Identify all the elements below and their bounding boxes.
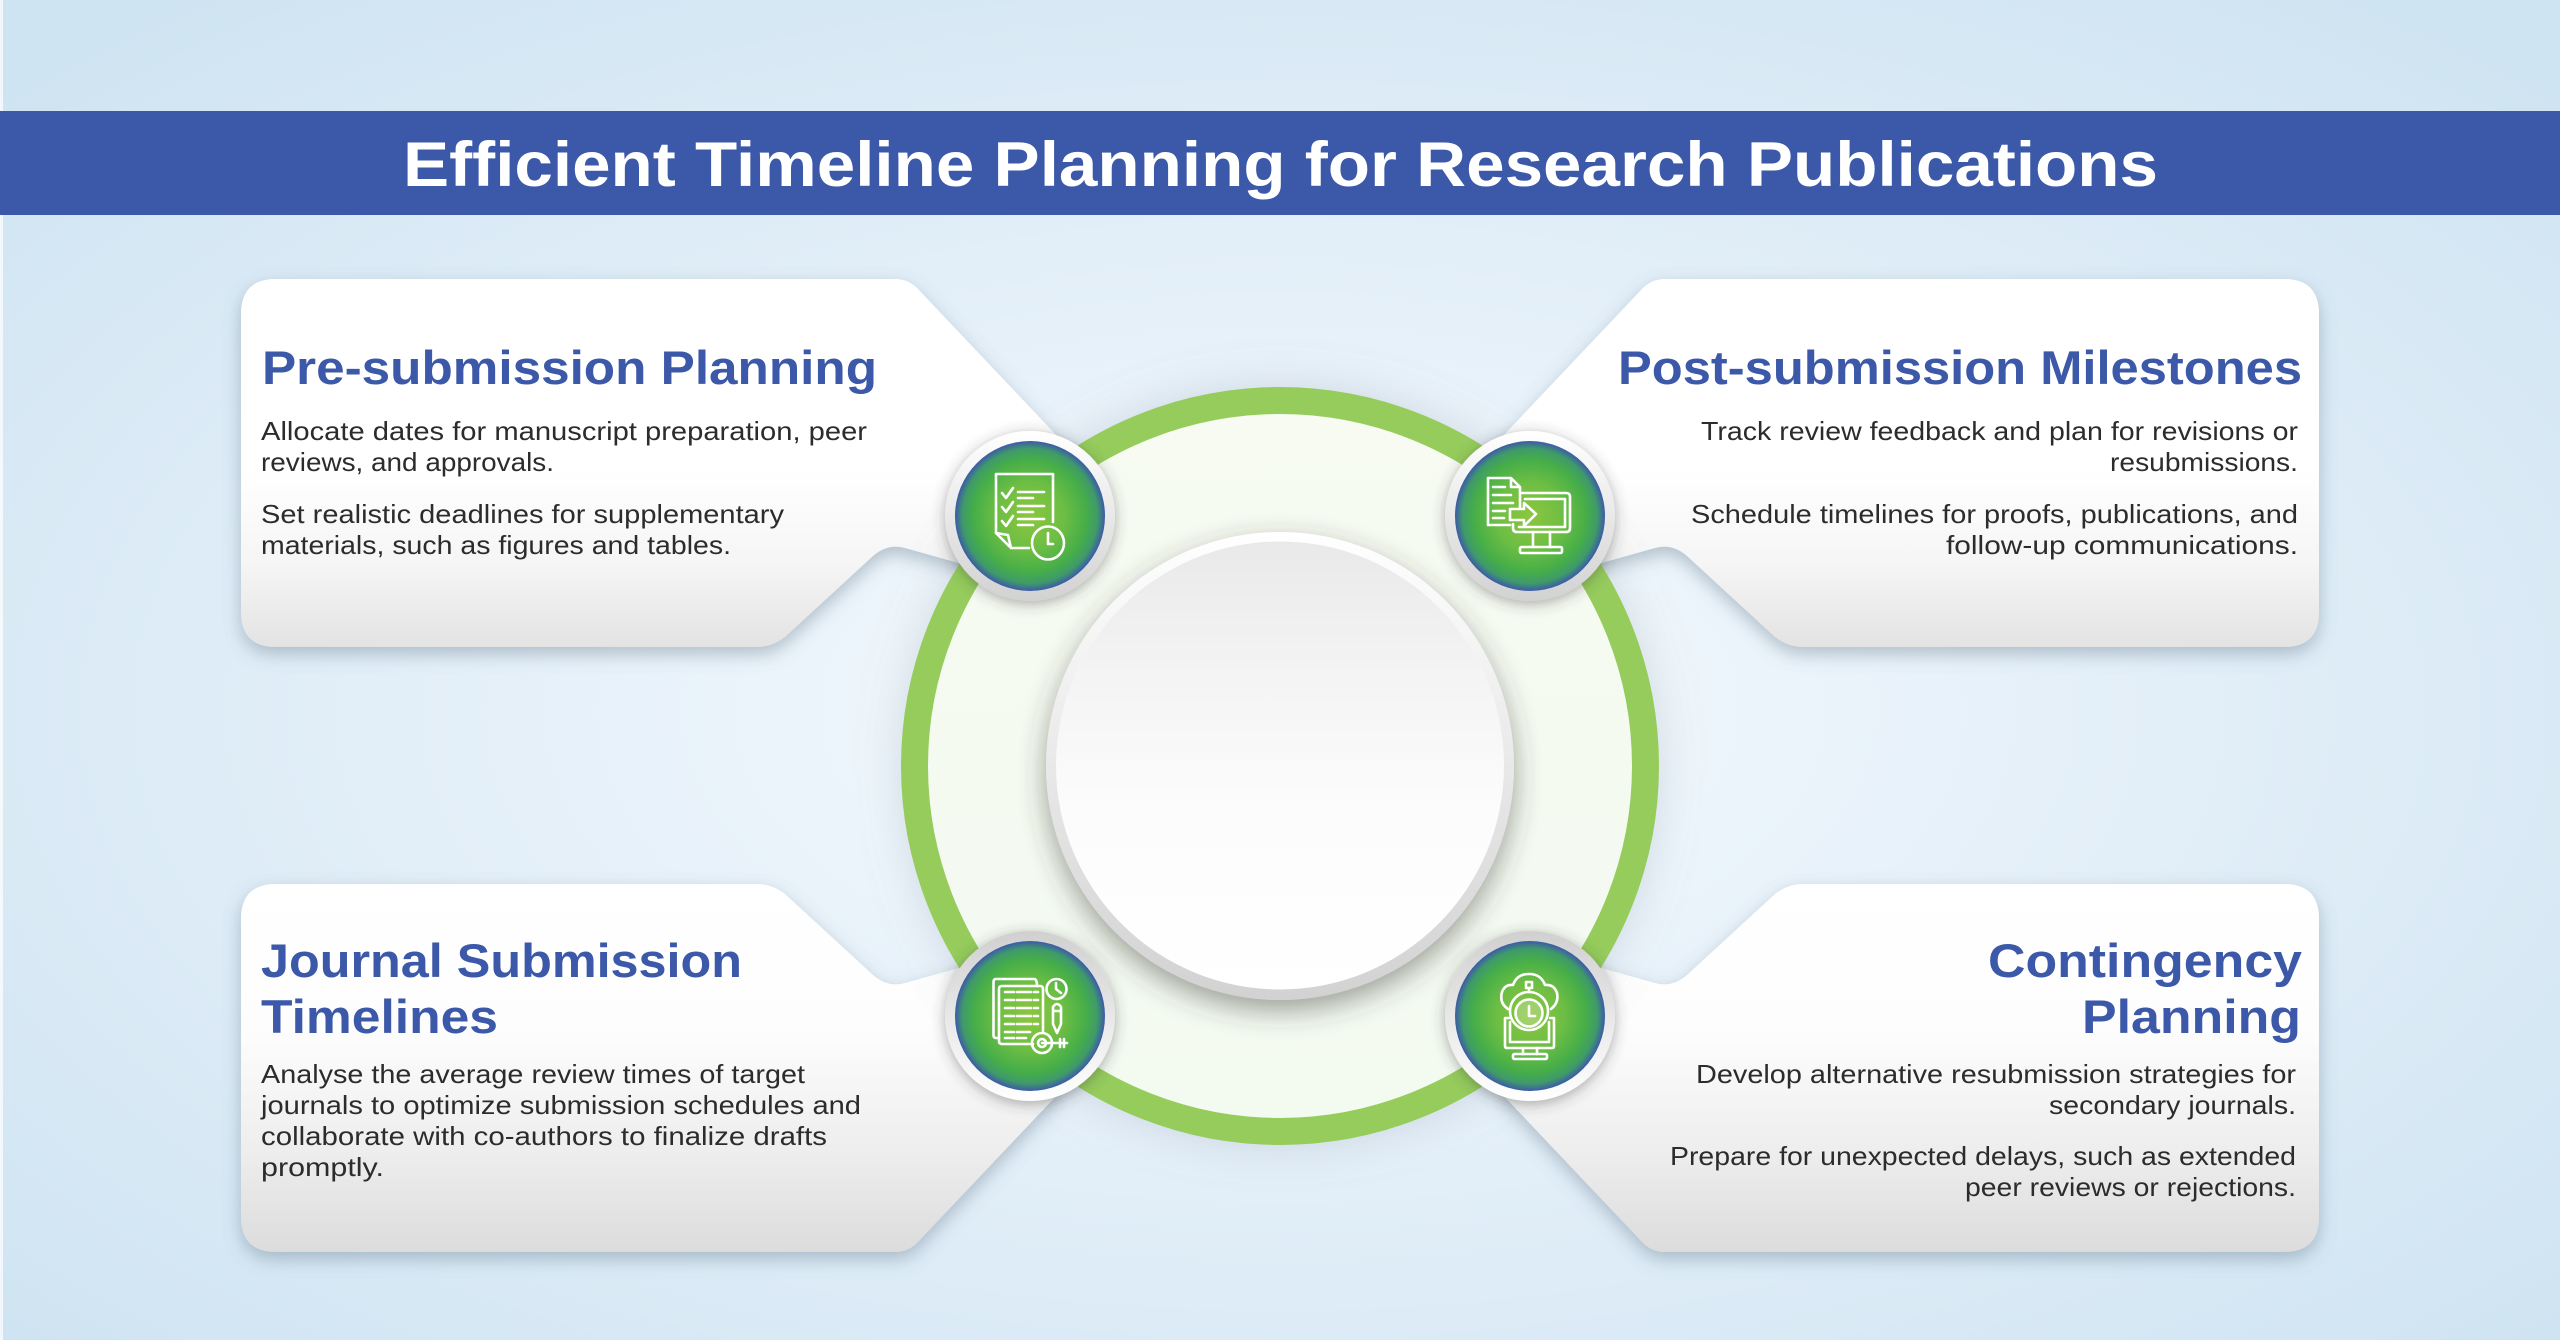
panel: journal submission timelines <box>241 884 1060 1252</box>
text block: pre-submission details <box>261 416 867 560</box>
central disc <box>1046 532 1514 1000</box>
icon: document to monitor <box>1445 431 1615 601</box>
heading: contingency planning <box>1988 934 2302 1043</box>
text block: post-submission details: resubmissions. <box>2110 447 2298 477</box>
green ring <box>914 400 1646 1132</box>
text block: pre-submission details: Set realistic deadlines for supplementary <box>261 499 784 529</box>
text block: pre-submission details: Allocate dates for manuscript preparation, peer <box>261 416 867 446</box>
panel: contingency planning <box>1500 884 2319 1252</box>
heading: post-submission milestones: Post-submission Milestones <box>1618 341 2302 394</box>
heading: contingency planning: Contingency <box>1988 934 2302 987</box>
panel: post-submission milestones <box>1500 279 2319 647</box>
icon: checklist with clock <box>945 431 1115 601</box>
text block: journal submission details <box>260 1059 861 1182</box>
text block: contingency details: secondary journals. <box>2049 1090 2296 1120</box>
heading: journal submission timelines: Journal Submission <box>261 934 742 987</box>
title banner <box>0 111 2560 215</box>
icon: cloud stopwatch on monitor <box>1445 931 1615 1101</box>
title: Efficient Timeline Planning for Research Publications <box>403 130 2158 200</box>
text block: contingency details: Prepare for unexpected delays, such as extended <box>1670 1141 2296 1171</box>
text block: journal submission details: Analyse the average review times of target <box>261 1059 806 1089</box>
text block: journal submission details: promptly. <box>261 1152 384 1182</box>
text block: contingency details <box>1670 1059 2296 1202</box>
text block: pre-submission details: materials, such as figures and tables. <box>261 530 731 560</box>
text block: post-submission details <box>1691 416 2298 560</box>
text block: post-submission details: Track review feedback and plan for revisions or <box>1701 416 2298 446</box>
heading: pre-submission planning: Pre-submission Planning <box>262 341 877 394</box>
heading: journal submission timelines <box>261 934 742 1043</box>
text block: journal submission details: collaborate with co-authors to finalize drafts <box>261 1121 827 1151</box>
icon: document, pencil and target <box>945 931 1115 1101</box>
panel: pre-submission planning <box>241 279 1060 647</box>
text block: pre-submission details: reviews, and approvals. <box>261 447 554 477</box>
text block: post-submission details: Schedule timelines for proofs, publications, and <box>1691 499 2298 529</box>
heading: journal submission timelines: Timelines <box>261 990 498 1043</box>
text block: post-submission details: follow-up communications. <box>1946 530 2298 560</box>
left edge highlight <box>0 0 3 1340</box>
text block: contingency details: peer reviews or rejections. <box>1965 1172 2296 1202</box>
text block: journal submission details: journals to optimize submission schedules and <box>260 1090 861 1120</box>
text block: contingency details: Develop alternative resubmission strategies for <box>1696 1059 2296 1089</box>
heading: contingency planning: Planning <box>2082 990 2301 1043</box>
